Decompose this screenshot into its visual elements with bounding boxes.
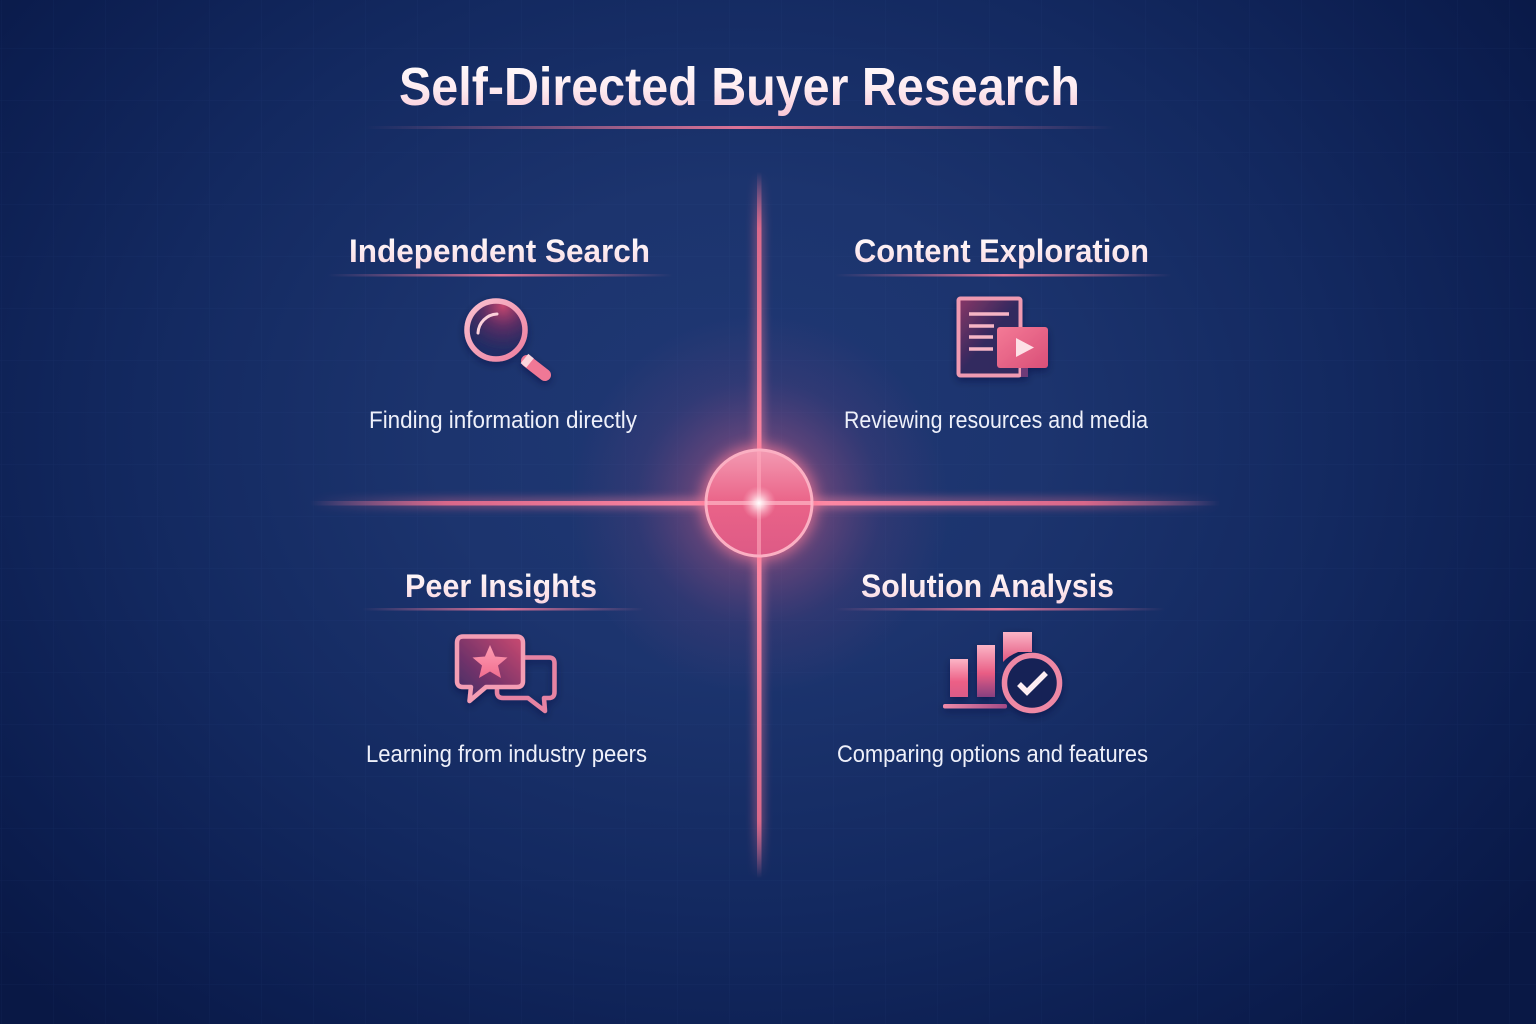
heading: independent search: Independent Search xyxy=(349,233,650,269)
description: Comparing options and features xyxy=(837,741,1148,768)
heading: solution analysis: Solution Analysis xyxy=(861,568,1114,604)
underline xyxy=(835,608,1165,610)
description: Learning from industry peers xyxy=(366,741,647,768)
panel: content exploration xyxy=(835,233,1172,434)
panel: independent search xyxy=(328,233,673,434)
heading: content exploration: Content Exploration xyxy=(854,233,1149,269)
title: Self-Directed Buyer Research xyxy=(399,57,1080,117)
underline xyxy=(362,608,644,610)
panel: peer insights xyxy=(362,568,647,768)
description: Reviewing resources and media xyxy=(844,407,1149,434)
underline xyxy=(835,274,1172,276)
description: Finding information directly xyxy=(369,407,637,434)
central glowing orb xyxy=(702,446,816,560)
underline xyxy=(328,274,673,276)
heading: peer insights: Peer Insights xyxy=(405,568,597,604)
panel: solution analysis xyxy=(835,568,1165,768)
icon: bar chart with check xyxy=(943,632,1060,710)
icon: speech bubbles with star xyxy=(457,636,554,711)
crosshair axes xyxy=(310,172,1220,878)
icon: magnifying glass xyxy=(467,301,545,375)
icon: document and video xyxy=(958,298,1048,377)
